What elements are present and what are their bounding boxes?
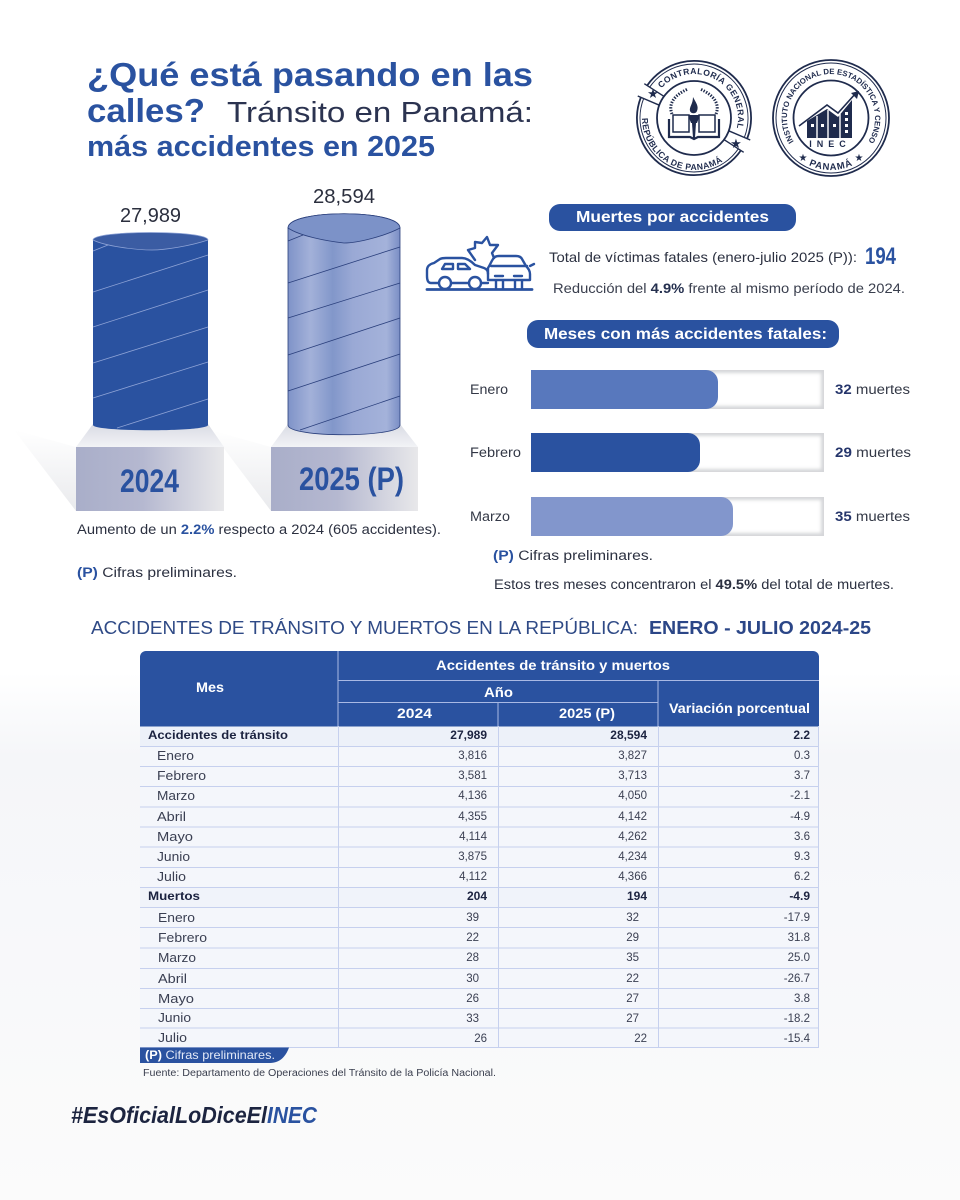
table	[140, 651, 819, 1048]
cylinder 2024: 27,989	[120, 205, 181, 227]
table header: 2025 (P)	[559, 706, 615, 721]
table heading: ENERO - JULIO 2024-25	[649, 618, 871, 638]
pedestal 2024: 2024	[120, 463, 179, 499]
badge: cifras preliminares: (P) Cifras preliminares.	[145, 1048, 275, 1062]
table body: 4,355	[458, 811, 487, 823]
table body: 3.8	[794, 993, 810, 1005]
table body: -4.9	[790, 811, 810, 823]
logo: Contraloría General: REPÚBLICA DE PANAMÁ	[642, 118, 722, 170]
bar: Enero: Enero	[470, 382, 508, 397]
table body: Julio	[157, 869, 186, 884]
table body: Muertos	[148, 889, 200, 903]
table body: 6.2	[794, 871, 810, 883]
table body: 0.3	[794, 750, 810, 762]
table body: -15.4	[784, 1033, 811, 1045]
logo: INEC: ★	[799, 153, 808, 164]
table body: 31.8	[788, 932, 810, 944]
cylinder 2025	[288, 186, 400, 435]
table heading: ACCIDENTES DE TRÁNSITO Y MUERTOS EN LA REPÚBLICA:	[91, 617, 638, 638]
title	[87, 56, 533, 163]
table body: 3,713	[618, 770, 647, 782]
logo: Contraloría General: ★	[730, 137, 742, 152]
table body: 4,136	[458, 790, 487, 802]
table body: 26	[466, 993, 479, 1005]
table body	[140, 726, 819, 1048]
table body: 3,875	[458, 851, 487, 863]
logo: Contraloría General: CONTRALORÍA GENERAL	[658, 68, 744, 128]
table body: 22	[634, 1033, 647, 1045]
heading pill: muertes por accidentes: Muertes por accidentes	[576, 209, 769, 226]
table body: 3.6	[794, 831, 810, 843]
table body: Julio	[158, 1030, 187, 1045]
table body: 27,989	[450, 728, 487, 742]
logo: Contraloría General: ★	[647, 87, 659, 102]
text: concentración: Estos tres meses concentraron el 49.5% del total de muertes.	[494, 577, 894, 592]
table body: 194	[627, 889, 647, 903]
table body: Junio	[158, 1010, 191, 1025]
table body: 33	[466, 1013, 479, 1025]
table body: Mayo	[157, 829, 193, 844]
table body: Mayo	[158, 991, 194, 1006]
stat: total de víctimas: Total de víctimas fatales (enero-julio 2025 (P)):	[549, 249, 857, 265]
heading pill: meses: Meses con más accidentes fatales:	[544, 326, 827, 343]
cylinder 2024	[93, 205, 208, 430]
bar chart: cylinders 2024 vs 2025	[14, 186, 418, 511]
table body: 39	[466, 912, 479, 924]
table header: Mes	[196, 680, 224, 695]
table body: 30	[466, 973, 479, 985]
table heading	[91, 617, 871, 638]
table body: -2.1	[790, 790, 810, 802]
table body: 204	[467, 889, 487, 903]
table body: 4,112	[459, 871, 487, 883]
table body: 4,366	[618, 871, 647, 883]
table body: 28,594	[610, 728, 647, 742]
hashtag: INEC	[267, 1102, 317, 1128]
heading pill: meses	[527, 320, 839, 348]
note: cifras preliminares right: (P) Cifras preliminares.	[493, 548, 653, 563]
logo: INEC: INSTITUTO NACIONAL DE ESTADÍSTICA Y CENSO	[782, 68, 880, 144]
table body: 4,050	[618, 790, 647, 802]
table body: 3,581	[458, 770, 487, 782]
cylinder shadows	[14, 430, 271, 511]
title: más accidentes en 2025	[87, 131, 435, 163]
bar: Marzo: Marzo	[470, 509, 510, 524]
table body: 4,114	[459, 831, 488, 843]
table body: -4.9	[789, 889, 810, 903]
table body: 4,142	[618, 811, 647, 823]
table body: -18.2	[784, 1013, 810, 1025]
table body: -26.7	[784, 973, 810, 985]
hashtag: #EsOficialLoDiceEl	[71, 1102, 268, 1128]
table header: Variación porcentual	[669, 701, 810, 716]
logo: Contraloría General	[636, 60, 752, 176]
table header: Año	[484, 685, 513, 700]
bar: Febrero: 29 muertes	[835, 445, 911, 460]
table body: Abril	[157, 809, 186, 824]
pedestal 2024	[76, 424, 224, 511]
table header: 2024	[397, 706, 433, 721]
table body: 25.0	[788, 952, 810, 964]
table body: 2.2	[793, 728, 810, 742]
table body: 3.7	[794, 770, 810, 782]
table body: 35	[626, 952, 639, 964]
logo: INEC	[772, 59, 890, 177]
table body: 4,262	[618, 831, 647, 843]
table body: 28	[466, 952, 479, 964]
table body: Marzo	[158, 950, 196, 965]
pedestal 2025: 2025 (P)	[299, 461, 404, 497]
table body: 4,234	[618, 851, 648, 863]
table body: Febrero	[158, 930, 207, 945]
title: Tránsito en Panamá:	[227, 97, 533, 129]
bar: Marzo	[470, 497, 910, 536]
table body: Enero	[157, 748, 194, 763]
table body: Accidentes de tránsito	[148, 728, 288, 742]
table body: 32	[626, 912, 639, 924]
table body: 26	[474, 1033, 487, 1045]
table body: 27	[626, 993, 639, 1005]
bar: Enero: 32 muertes	[835, 382, 910, 397]
table body: 9.3	[794, 851, 810, 863]
table header: Accidentes de tránsito y muertos	[436, 658, 670, 673]
table header	[140, 651, 819, 726]
bar: Enero	[470, 370, 910, 409]
text: reducción: Reducción del 4.9% frente al mismo período de 2024.	[553, 281, 905, 296]
bar: Febrero	[470, 433, 911, 472]
table body: 22	[626, 973, 639, 985]
title: ¿Qué está pasando en las	[87, 56, 533, 93]
logo: INEC: ★	[855, 153, 864, 164]
logo: INEC: PANAMÁ	[809, 158, 852, 170]
note: cifras preliminares left: (P) Cifras preliminares.	[77, 565, 237, 580]
table body: Febrero	[157, 768, 206, 783]
table body: 3,827	[618, 750, 647, 762]
table body: 29	[626, 932, 639, 944]
table body: Abril	[158, 971, 187, 986]
cylinder 2025: 28,594	[313, 186, 375, 208]
table body: Marzo	[157, 788, 195, 803]
text: aumento: Aumento de un 2.2% respecto a 2024 (605 accidentes).	[77, 522, 441, 537]
table body: 3,816	[458, 750, 487, 762]
pedestal 2025	[271, 424, 418, 511]
logo: INEC: INEC	[809, 139, 851, 149]
icon: car crash	[427, 237, 534, 290]
bar chart: meses	[470, 370, 911, 536]
table body: Junio	[157, 849, 190, 864]
stat: total de víctimas: 194	[865, 243, 897, 270]
source: Fuente: Departamento de Operaciones del Tránsito de la Policía Nacional.	[143, 1068, 496, 1079]
table body: -17.9	[784, 912, 810, 924]
stat: total de víctimas	[549, 243, 897, 270]
bar: Marzo: 35 muertes	[835, 509, 910, 524]
bar: Febrero: Febrero	[470, 445, 521, 460]
heading pill: muertes por accidentes	[549, 204, 796, 231]
table body: 27	[626, 1013, 639, 1025]
table body: Enero	[158, 910, 195, 925]
table body: 22	[466, 932, 479, 944]
title: calles?	[87, 92, 205, 129]
